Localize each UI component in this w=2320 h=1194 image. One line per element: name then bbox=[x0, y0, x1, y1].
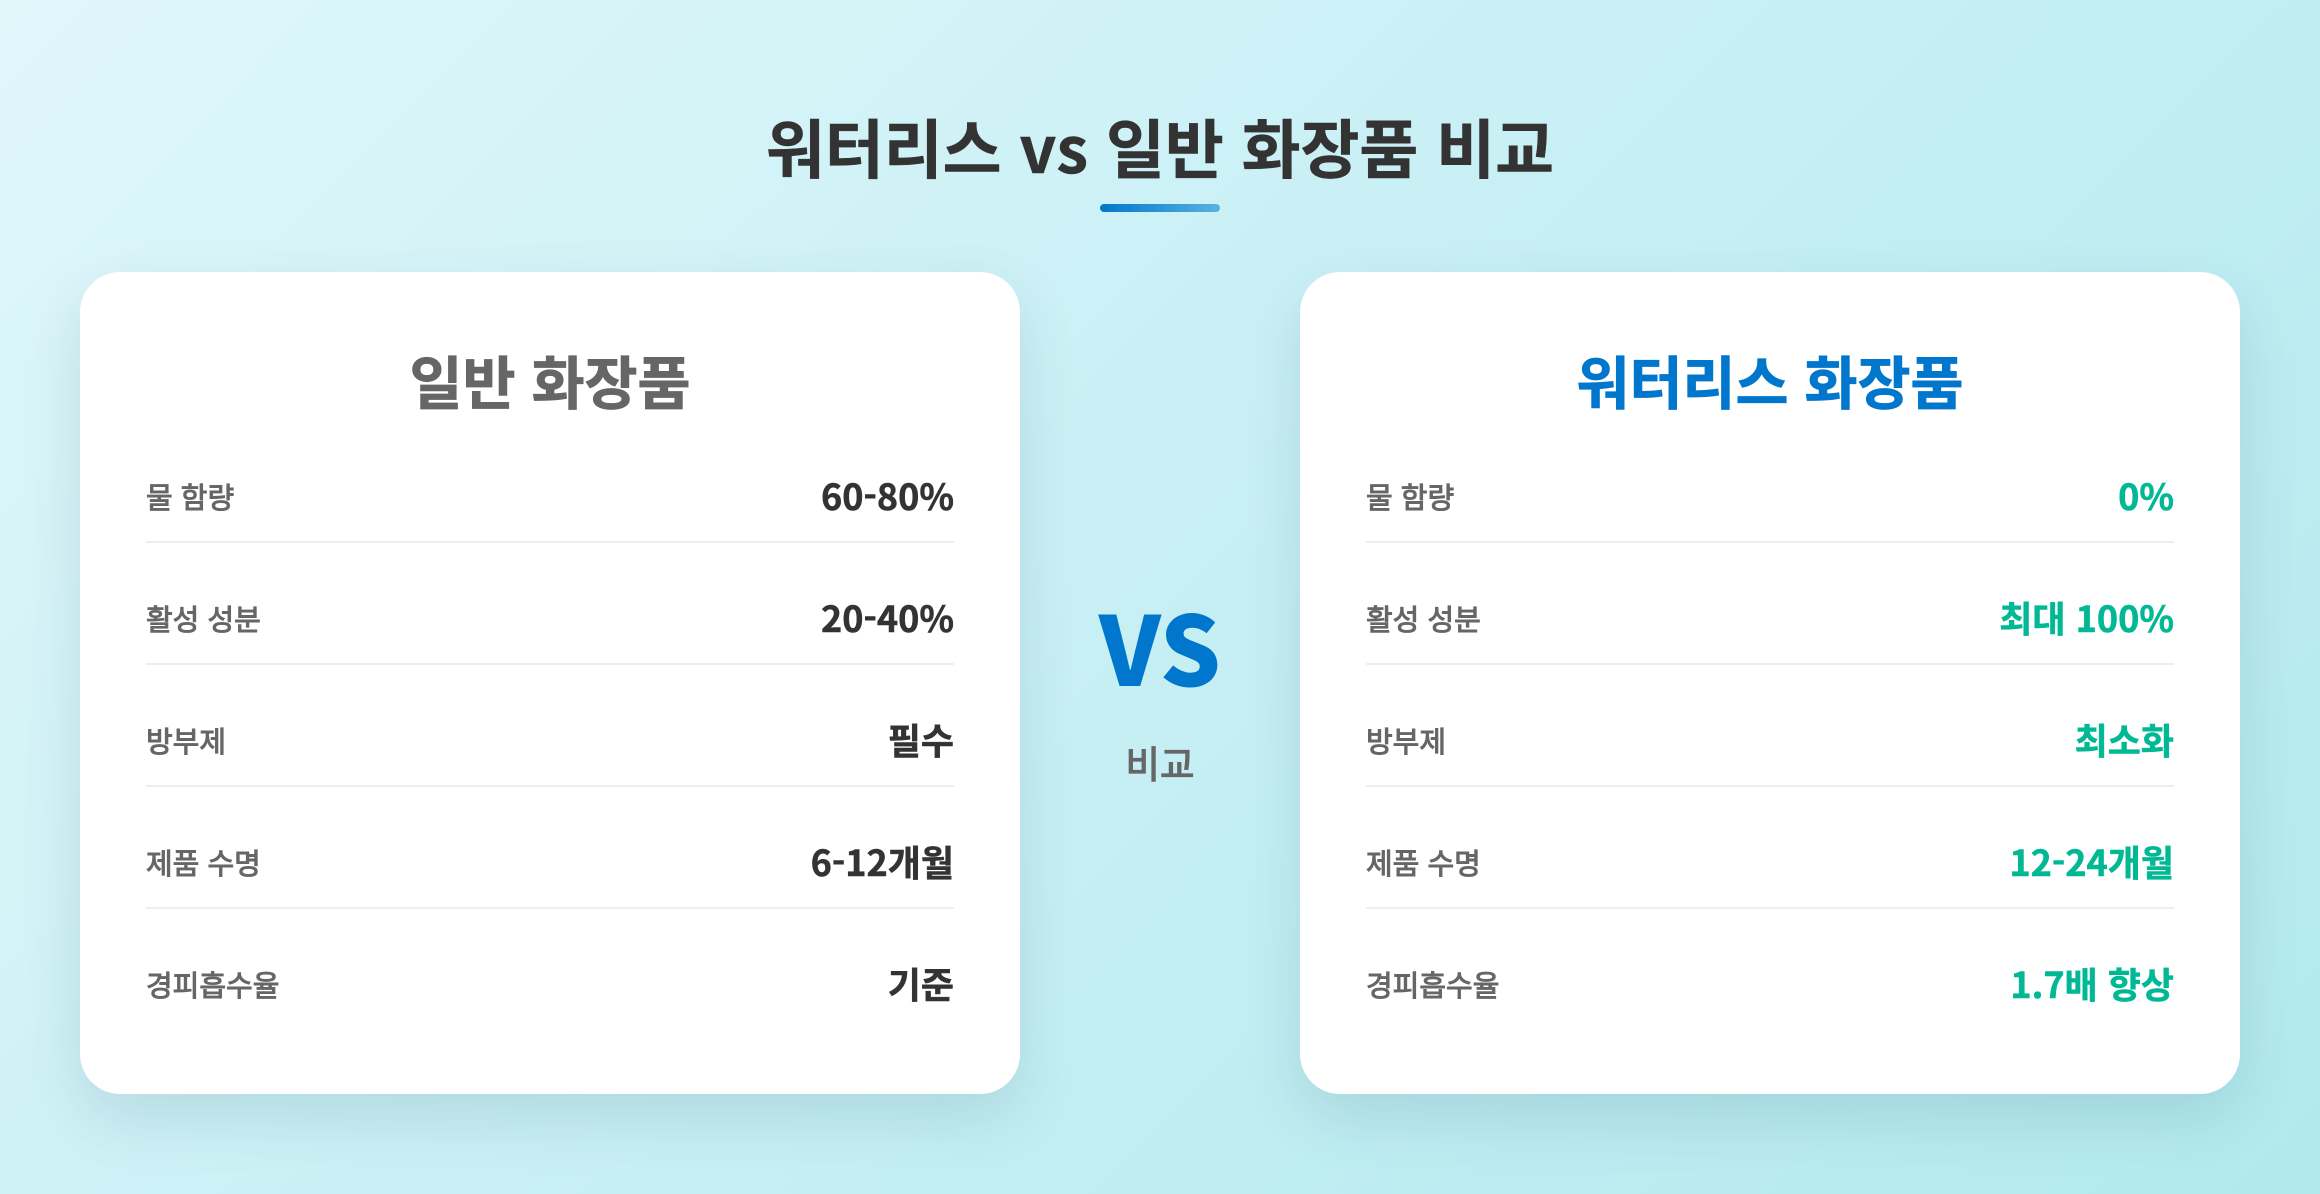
heading: general cosmetics: 일반 화장품 bbox=[409, 337, 691, 421]
panel: general cosmetics bbox=[80, 272, 1020, 1094]
row: active ingredients bbox=[1366, 575, 2174, 665]
row: absorption rate bbox=[146, 957, 954, 1009]
row: water content bbox=[146, 453, 954, 543]
heading: waterless cosmetics: 워터리스 화장품 bbox=[1576, 337, 1964, 421]
row: preservatives: 방부제 bbox=[1366, 719, 1446, 761]
row: preservatives bbox=[146, 697, 954, 787]
row: preservatives: 방부제 bbox=[146, 719, 226, 761]
title: 워터리스 vs 일반 화장품 비교 bbox=[766, 100, 1554, 192]
row: shelf life: 6-12개월 bbox=[811, 835, 954, 887]
comparison caption: 비교 bbox=[1126, 734, 1194, 789]
row: absorption rate: 경피흡수율 bbox=[146, 963, 279, 1005]
row: water content: 물 함량 bbox=[1366, 475, 1454, 517]
row: absorption rate: 경피흡수율 bbox=[1366, 963, 1499, 1005]
row: active ingredients: 20-40% bbox=[821, 591, 954, 643]
row: shelf life: 제품 수명 bbox=[146, 841, 261, 883]
row: water content: 0% bbox=[2118, 469, 2174, 521]
panel: waterless cosmetics bbox=[1300, 272, 2240, 1094]
row: absorption rate: 기준 bbox=[888, 957, 954, 1009]
title underline bbox=[1100, 204, 1220, 212]
VS label: VS bbox=[1099, 575, 1221, 714]
row: preservatives: 필수 bbox=[888, 713, 954, 765]
row: shelf life: 12-24개월 bbox=[2009, 835, 2174, 887]
row: active ingredients: 최대 100% bbox=[1999, 591, 2174, 643]
row: absorption rate bbox=[1366, 957, 2174, 1009]
row: water content bbox=[1366, 453, 2174, 543]
row: preservatives: 최소화 bbox=[2075, 713, 2174, 765]
row: shelf life bbox=[1366, 819, 2174, 909]
row: shelf life: 제품 수명 bbox=[1366, 841, 1481, 883]
row: preservatives bbox=[1366, 697, 2174, 787]
row: active ingredients: 활성 성분 bbox=[146, 597, 261, 639]
row: water content: 물 함량 bbox=[146, 475, 234, 517]
row: active ingredients: 활성 성분 bbox=[1366, 597, 1481, 639]
row: shelf life bbox=[146, 819, 954, 909]
row: active ingredients bbox=[146, 575, 954, 665]
row: water content: 60-80% bbox=[821, 469, 954, 521]
row: absorption rate: 1.7배 향상 bbox=[2010, 957, 2174, 1009]
